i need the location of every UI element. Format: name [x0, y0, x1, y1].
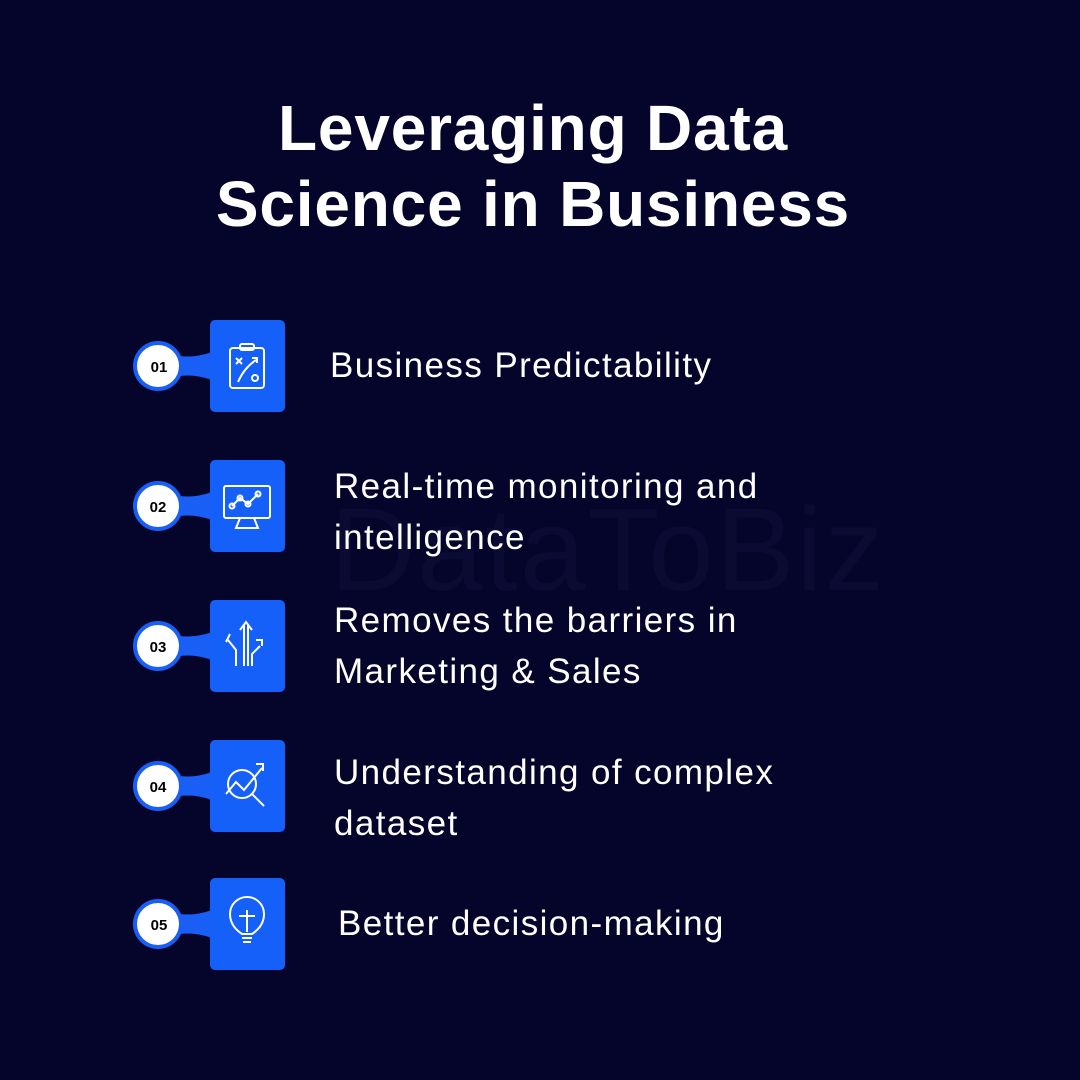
icon: bulb [230, 897, 264, 942]
step 03 [135, 600, 285, 692]
step 03: 03 [150, 639, 166, 656]
text 01: Business Predictability [330, 346, 712, 385]
text 03: Removes the barriers in [334, 601, 738, 640]
icon: clipboard [230, 344, 264, 388]
step 04: 04 [150, 779, 167, 796]
text 03 [334, 601, 738, 691]
text 05: Better decision-making [338, 904, 725, 943]
text 04 [334, 753, 774, 843]
text 04: Understanding of complex [334, 753, 774, 792]
step 02 [135, 460, 285, 552]
icon: arrows [226, 622, 262, 666]
icon: magnifier chart [226, 764, 264, 806]
step 05: 05 [151, 917, 167, 934]
watermark: DataToBiz [330, 484, 886, 616]
title: Leveraging Data [278, 92, 788, 164]
text 02: Real-time monitoring and [334, 467, 759, 506]
text 02 [334, 467, 759, 557]
text 03: Marketing & Sales [334, 652, 642, 691]
step 04 [135, 740, 285, 832]
icon: monitor chart [224, 486, 270, 528]
step 05 [135, 878, 285, 970]
title: Science in Business [216, 168, 850, 240]
step 02: 02 [150, 499, 166, 516]
title [216, 92, 850, 240]
step 01 [135, 320, 285, 412]
step 01: 01 [151, 359, 167, 376]
text 04: dataset [334, 804, 459, 843]
text 02: intelligence [334, 518, 526, 557]
